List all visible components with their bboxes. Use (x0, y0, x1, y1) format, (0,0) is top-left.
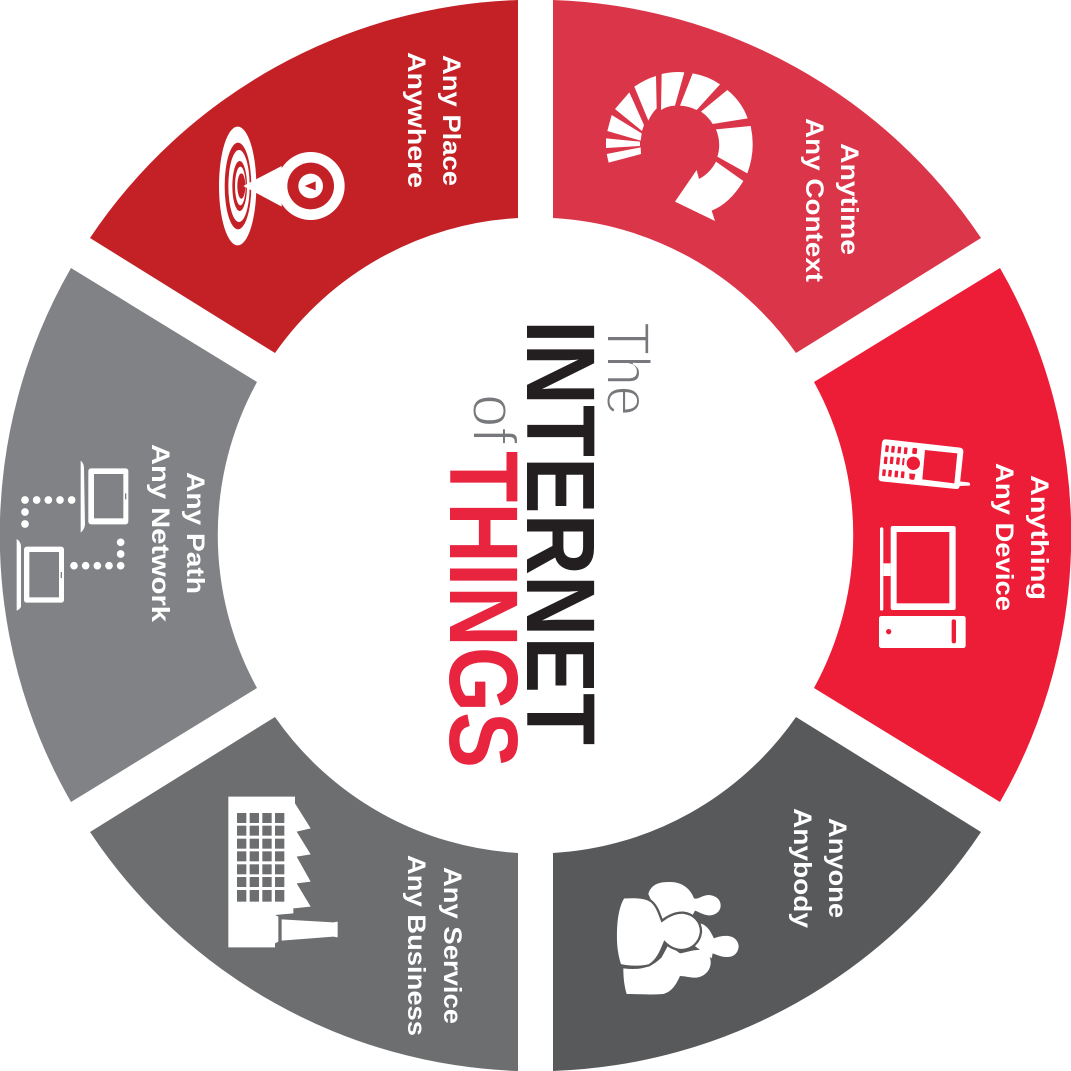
icon: phone and computer (879, 439, 970, 648)
icon: spiral staircase arrow (606, 72, 753, 221)
label (146, 444, 209, 622)
sector shape (553, 0, 981, 353)
label: Anyone (823, 818, 851, 918)
label (402, 855, 466, 1036)
sector shape (0, 268, 257, 802)
title word: THINGS: THINGS (429, 451, 538, 768)
panel: any path any network (0, 268, 257, 802)
title word: The: The (594, 322, 662, 416)
label (990, 463, 1053, 611)
panel: anytime any context (553, 0, 981, 353)
sector shape (814, 268, 1071, 802)
label: Any Path (181, 472, 209, 594)
sector shape (90, 0, 518, 353)
label (788, 808, 851, 928)
icon: connected laptops (17, 461, 128, 611)
label: Any Business (402, 855, 430, 1036)
sector shape (553, 717, 981, 1071)
title word: of: of (459, 394, 528, 445)
title (429, 320, 662, 768)
label: Anything (1025, 475, 1053, 600)
label (800, 118, 863, 283)
label: Any Network (146, 444, 174, 622)
label: Anytime (835, 143, 863, 255)
title word: INTERNET: INTERNET (506, 320, 615, 745)
panel: any service any business (90, 717, 518, 1071)
label: Any Context (800, 118, 828, 283)
panel: anyone anybody (553, 717, 981, 1071)
label: Any Device (990, 463, 1018, 611)
label: Anywhere (402, 52, 430, 188)
sector shape (90, 717, 518, 1071)
label: Anybody (788, 808, 816, 928)
panel: any place anywhere (90, 0, 518, 353)
label: Any Service (438, 867, 466, 1024)
icon: target and location pin (219, 127, 345, 245)
label (402, 52, 465, 188)
panel: anything any device (814, 268, 1071, 802)
icon: factory (228, 797, 338, 947)
label: Any Place (437, 55, 465, 186)
icon: group of people (616, 882, 739, 994)
